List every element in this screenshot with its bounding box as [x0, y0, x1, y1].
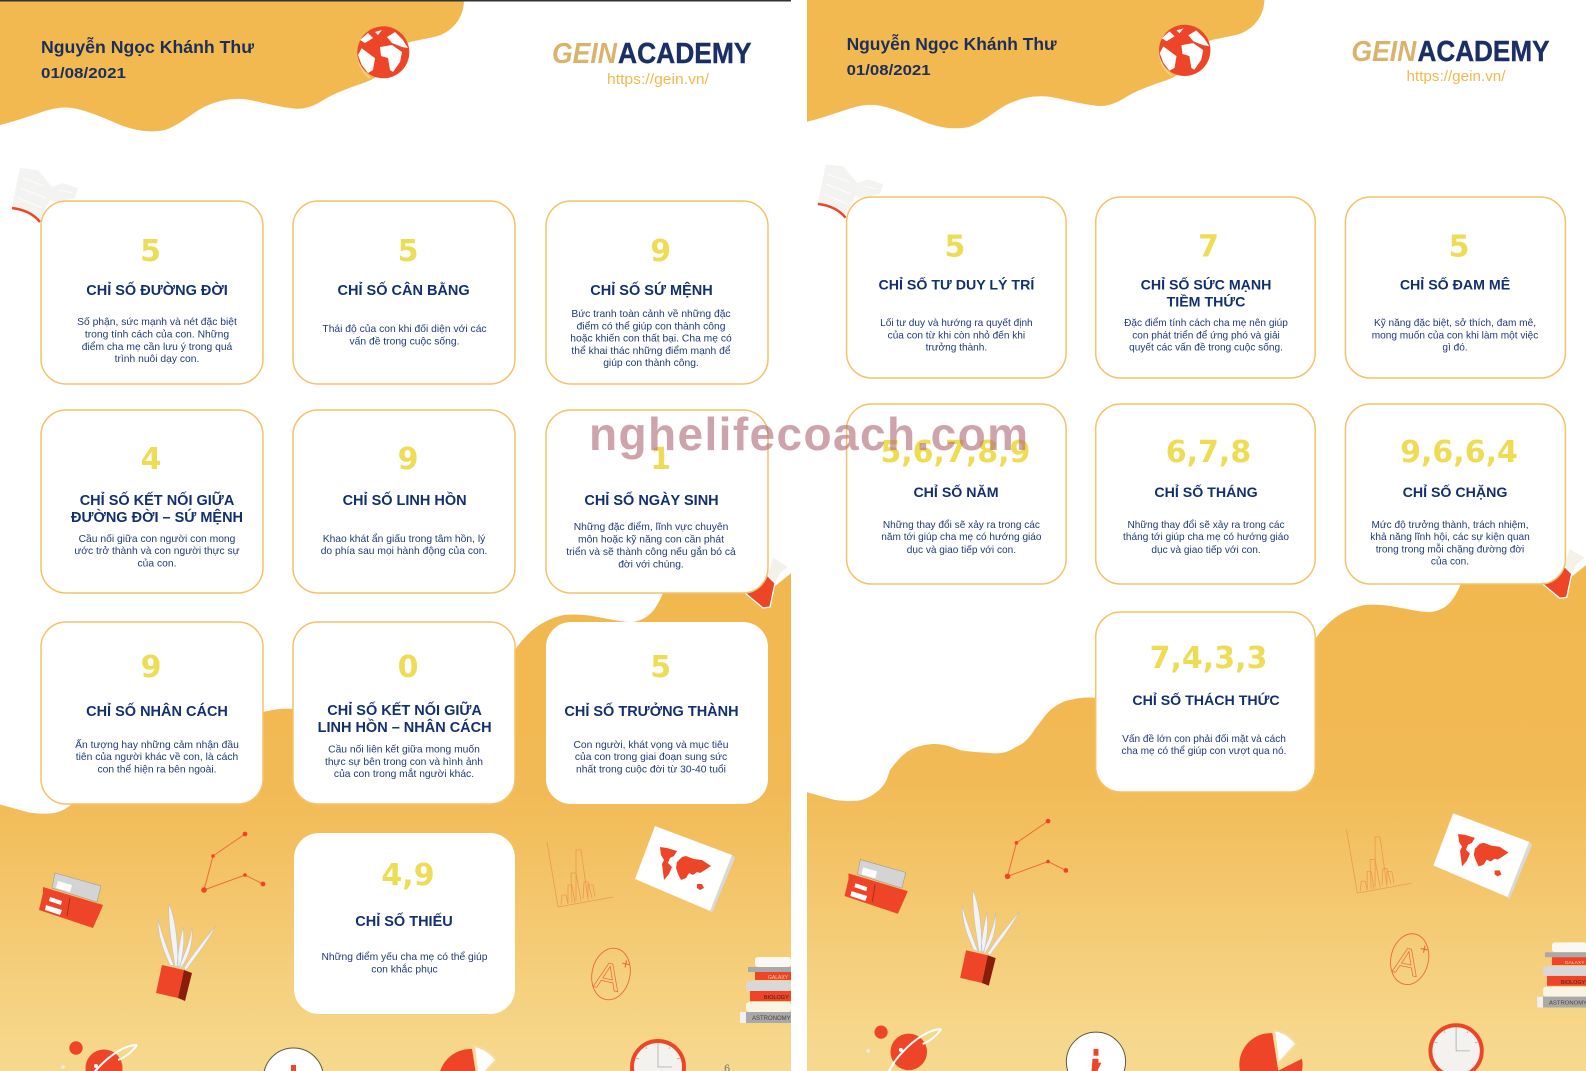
icon: A plus grade: A — [1390, 938, 1423, 985]
card: sức mạnh tiềm thức: CHỈ SỐ SỨC MẠNH — [1141, 276, 1271, 294]
icon: world map — [1433, 813, 1532, 899]
card: năm: dục và giao tiếp với con. — [907, 544, 1016, 556]
icon: constellation — [1005, 819, 1068, 879]
card: chặng: 9,6,6,4 — [1400, 435, 1518, 470]
card: chặng — [1345, 404, 1565, 584]
card: nhân cách: con thể hiện ra bên ngoài. — [97, 764, 217, 776]
icon: constellation — [201, 832, 265, 893]
icon: stack of books: BIOLOGY — [764, 995, 789, 1001]
card: linh hồn: Khao khát ẩn giấu trong tâm hồn, lý — [323, 533, 486, 545]
card: ngày sinh: triển và sẽ thành công nếu gắn bó cả — [566, 545, 736, 558]
icon: A plus grade: A — [591, 954, 625, 1001]
logo — [552, 38, 752, 70]
card: tư duy lý trí: CHỈ SỐ TƯ DUY LÝ TRÍ — [879, 276, 1035, 294]
icon: globe — [357, 26, 409, 78]
author name: Nguyễn Ngọc Khánh Thư — [41, 36, 254, 57]
card: thiếu: Những điểm yếu cha mẹ có thể giúp — [321, 951, 488, 963]
card: tháng — [1096, 404, 1315, 584]
card: kết nối linh hồn nhân cách: của con trong mắt người khác. — [334, 767, 474, 780]
card: tư duy lý trí: 5 — [944, 230, 965, 264]
card: đường đời: điểm cha mẹ cần lưu ý trong quá — [82, 341, 233, 353]
card: sức mạnh tiềm thức: con phát triển để ứng phó và giải — [1132, 330, 1280, 342]
top rule — [0, 0, 791, 2]
icon: stack of books: GALAXY — [768, 975, 789, 981]
card: đường đời: trình nuôi dạy con. — [115, 354, 199, 365]
card: tư duy lý trí: Lối tư duy và hướng ra quyết định — [880, 317, 1033, 329]
card: nhân cách — [41, 622, 263, 804]
icon: A plus grade: + — [1418, 941, 1430, 959]
icon: line chart sketch — [1346, 829, 1412, 893]
card: nhân cách: 9 — [141, 650, 161, 685]
right page bottom wave background — [806, 557, 1586, 1071]
card: trưởng thành: nhất trong cuộc đời từ 30-40 tuổi — [576, 764, 726, 776]
card: cân bằng: 5 — [398, 234, 418, 269]
card: tháng: tháng tới giúp cha mẹ có hướng giáo — [1123, 532, 1289, 543]
right page header blob — [806, 0, 1264, 128]
icon: world map — [635, 826, 735, 913]
card: đường đời — [41, 201, 263, 384]
card: trưởng thành: Con người, khát vọng và mục tiêu — [573, 740, 729, 751]
card: kết nối linh hồn nhân cách: CHỈ SỐ KẾT NỐI GIỮA — [327, 701, 482, 719]
icon: A plus grade — [1386, 930, 1433, 988]
card: đường đời: 5 — [140, 234, 161, 269]
card: ngày sinh: môn hoặc kỹ năng con cần phát — [578, 534, 724, 546]
card: đam mê: CHỈ SỐ ĐAM MÊ — [1400, 276, 1510, 294]
icon: flask — [745, 558, 788, 608]
card: sứ mệnh: thể khai thác những điểm mạnh để — [571, 345, 731, 357]
card: cân bằng — [293, 201, 515, 384]
icon: plant — [156, 904, 216, 1001]
card: đam mê: mong muốn của con khi làm một việc — [1372, 330, 1538, 342]
logo: GEIN — [552, 38, 618, 70]
card: đường đời: Số phận, sức mạnh và nét đặc biệt — [77, 316, 237, 328]
card: trưởng thành: 5 — [650, 650, 671, 685]
icon: open book — [818, 164, 883, 218]
card: nhân cách: Ấn tượng hay những cảm nhận đầu — [75, 738, 239, 751]
card: ngày sinh — [546, 410, 768, 593]
card: đam mê — [1345, 197, 1565, 378]
icon: planet — [61, 1041, 137, 1071]
card: ngày sinh: Những đặc điểm, lĩnh vực chuyên — [574, 521, 729, 533]
card: kết nối linh hồn nhân cách: LINH HỒN – NHÂN CÁCH — [318, 718, 492, 736]
card: đường đời: trong tính cách của con. Những — [85, 328, 229, 340]
card: đam mê: gì đó. — [1442, 342, 1468, 354]
card: cân bằng: vấn đề trong cuộc sống. — [350, 336, 459, 348]
card: kết nối đường đời sứ mệnh: CHỈ SỐ KẾT NỐI GIỮA — [80, 491, 235, 509]
card: sứ mệnh: CHỈ SỐ SỨ MỆNH — [590, 281, 713, 299]
card: tháng: 6,7,8 — [1166, 435, 1251, 470]
card: thách thức — [1096, 612, 1315, 792]
card: thiếu: 4,9 — [381, 858, 435, 893]
card: sức mạnh tiềm thức — [1096, 197, 1315, 378]
card: trưởng thành: CHỈ SỐ TRƯỞNG THÀNH — [564, 702, 739, 720]
card: sứ mệnh: điểm có thể giúp con thành công — [577, 320, 726, 332]
icon: open book — [12, 168, 78, 222]
card: sức mạnh tiềm thức: 7 — [1198, 230, 1219, 264]
card: ngày sinh: CHỈ SỐ NGÀY SINH — [584, 491, 719, 509]
card: kết nối đường đời sứ mệnh: 4 — [141, 442, 161, 477]
card: kết nối linh hồn nhân cách: 0 — [398, 650, 418, 685]
icon: stack of books: ASTRONOMY — [1549, 1001, 1586, 1007]
icon: filing box — [39, 873, 103, 928]
icon: flask — [1542, 549, 1585, 598]
icon: planet — [866, 1026, 941, 1071]
card: linh hồn: CHỈ SỐ LINH HỒN — [343, 491, 467, 509]
card: năm — [847, 404, 1066, 584]
card: đường đời: CHỈ SỐ ĐƯỜNG ĐỜI — [86, 281, 228, 299]
logo — [1351, 36, 1550, 68]
card: trưởng thành: của con trong giai đoạn sung sức — [575, 751, 727, 763]
card: kết nối đường đời sứ mệnh — [41, 410, 263, 593]
icon: pie chart — [439, 1046, 503, 1071]
card: nhân cách: tiên của người khác về con, là cách — [76, 751, 239, 763]
card: nhân cách: CHỈ SỐ NHÂN CÁCH — [86, 702, 228, 720]
card: đam mê: Kỹ năng đặc biệt, sở thích, đam mê, — [1374, 317, 1536, 329]
card: năm: CHỈ SỐ NĂM — [913, 483, 999, 501]
icon: clock — [632, 1041, 684, 1071]
icon: stack of books — [1537, 942, 1586, 1007]
card: kết nối đường đời sứ mệnh: ước trở thành và con người thực sự — [74, 545, 240, 557]
icon: line chart sketch — [547, 842, 613, 907]
card: thách thức: Vấn đề lớn con phải đối mặt và cách — [1122, 733, 1286, 745]
icon: clock — [1430, 1025, 1482, 1071]
icon: globe — [1159, 25, 1210, 76]
card: ngày sinh: đời với chúng. — [618, 560, 684, 570]
card: thiếu: con khắc phục — [371, 962, 438, 976]
card: linh hồn: 9 — [398, 442, 418, 477]
date: 01/08/2021 — [41, 65, 126, 82]
watermark: nghelifecoach.com — [589, 408, 1029, 460]
icon: filing box — [845, 860, 908, 914]
icon: science badge — [1066, 1032, 1126, 1071]
card: kết nối đường đời sứ mệnh: ĐƯỜNG ĐỜI – SỨ MỆNH — [71, 508, 243, 526]
card: linh hồn — [293, 410, 515, 593]
card: thiếu — [294, 833, 515, 1014]
card: thách thức: CHỈ SỐ THÁCH THỨC — [1132, 691, 1280, 709]
card: năm: 5,6,7,8,9 — [880, 435, 1030, 470]
card: sức mạnh tiềm thức: Đặc điểm tính cách cha mẹ nên giúp — [1124, 317, 1288, 329]
card: sức mạnh tiềm thức: TIỀM THỨC — [1167, 292, 1245, 310]
icon: science badge — [264, 1048, 324, 1071]
card: chặng: khả năng lĩnh hội, các sự kiện quan — [1370, 532, 1530, 543]
card: chặng: trong trong mỗi chặng đường đời — [1376, 542, 1524, 556]
url: https://gein.vn/ — [1406, 68, 1506, 85]
card: sứ mệnh: 9 — [650, 234, 671, 269]
card: linh hồn: do phía sau mọi hành động của con. — [321, 545, 487, 557]
logo: ACADEMY — [1418, 36, 1550, 68]
left page header blob — [0, 0, 464, 131]
url: https://gein.vn/ — [607, 71, 710, 88]
card: trưởng thành — [546, 622, 768, 804]
card: thách thức: cha mẹ có thể giúp con vượt qua nó. — [1122, 745, 1286, 757]
card: sứ mệnh — [546, 201, 768, 384]
icon: A plus grade — [587, 945, 635, 1003]
icon: stack of books: GALAXY — [1565, 960, 1585, 966]
left page bottom wave background — [0, 566, 800, 1071]
card: sứ mệnh: giúp con thành công. — [603, 358, 699, 369]
logo: ACADEMY — [618, 38, 752, 70]
card: kết nối linh hồn nhân cách — [293, 622, 515, 804]
icon: stack of books: BIOLOGY — [1561, 980, 1586, 986]
card: năm: năm tới giúp cha mẹ có hướng giáo — [881, 532, 1042, 543]
icon: stack of books — [740, 957, 791, 1023]
icon: A plus grade: + — [620, 955, 632, 974]
card: chặng: CHỈ SỐ CHẶNG — [1403, 483, 1507, 501]
card: thách thức: 7,4,3,3 — [1150, 641, 1267, 676]
card: năm: Những thay đổi sẽ xảy ra trong các — [883, 519, 1040, 531]
card: chặng: của con. — [1431, 556, 1469, 568]
card: sức mạnh tiềm thức: quyết các vấn đề trong cuộc sống. — [1129, 342, 1283, 354]
card: cân bằng: CHỈ SỐ CÂN BẰNG — [338, 281, 470, 299]
author name: Nguyễn Ngọc Khánh Thư — [847, 33, 1057, 54]
card: kết nối linh hồn nhân cách: thực sự bên trong con và hình ảnh — [325, 757, 483, 768]
card: kết nối đường đời sứ mệnh: của con. — [138, 558, 176, 570]
card: kết nối đường đời sứ mệnh: Cầu nối giữa con người con mong — [79, 533, 236, 545]
logo: GEIN — [1351, 36, 1417, 68]
card: tư duy lý trí: của con từ khi còn nhỏ đến khi — [888, 330, 1025, 342]
card: kết nối linh hồn nhân cách: Cầu nối liên kết giữa mong muốn — [328, 744, 480, 756]
card: tư duy lý trí: trưởng thành. — [926, 342, 987, 354]
date: 01/08/2021 — [847, 62, 931, 79]
card: cân bằng: Thái độ của con khi đối diện với các — [322, 323, 487, 335]
icon: plant — [960, 890, 1019, 986]
card: tháng: CHỈ SỐ THÁNG — [1154, 483, 1258, 501]
card: tháng: Những thay đổi sẽ xảy ra trong các — [1127, 519, 1285, 531]
card: tháng: dục và giao tiếp với con. — [1151, 544, 1261, 556]
card: thiếu: CHỈ SỐ THIẾU — [355, 912, 453, 930]
card: chặng: Mức độ trưởng thành, trách nhiệm, — [1371, 519, 1529, 531]
card: sứ mệnh: hoặc khiến con thất bại. Cha mẹ có — [570, 332, 732, 344]
card: sứ mệnh: Bức tranh toàn cảnh về những đặc — [571, 308, 731, 320]
card: đam mê: 5 — [1449, 230, 1469, 264]
card: ngày sinh: 1 — [650, 442, 671, 477]
icon: pie chart — [1239, 1030, 1303, 1071]
icon: stack of books: ASTRONOMY — [752, 1016, 791, 1022]
card: tư duy lý trí — [847, 197, 1066, 378]
panel: right page — [818, 25, 1586, 1071]
panel: left page — [12, 26, 791, 1071]
